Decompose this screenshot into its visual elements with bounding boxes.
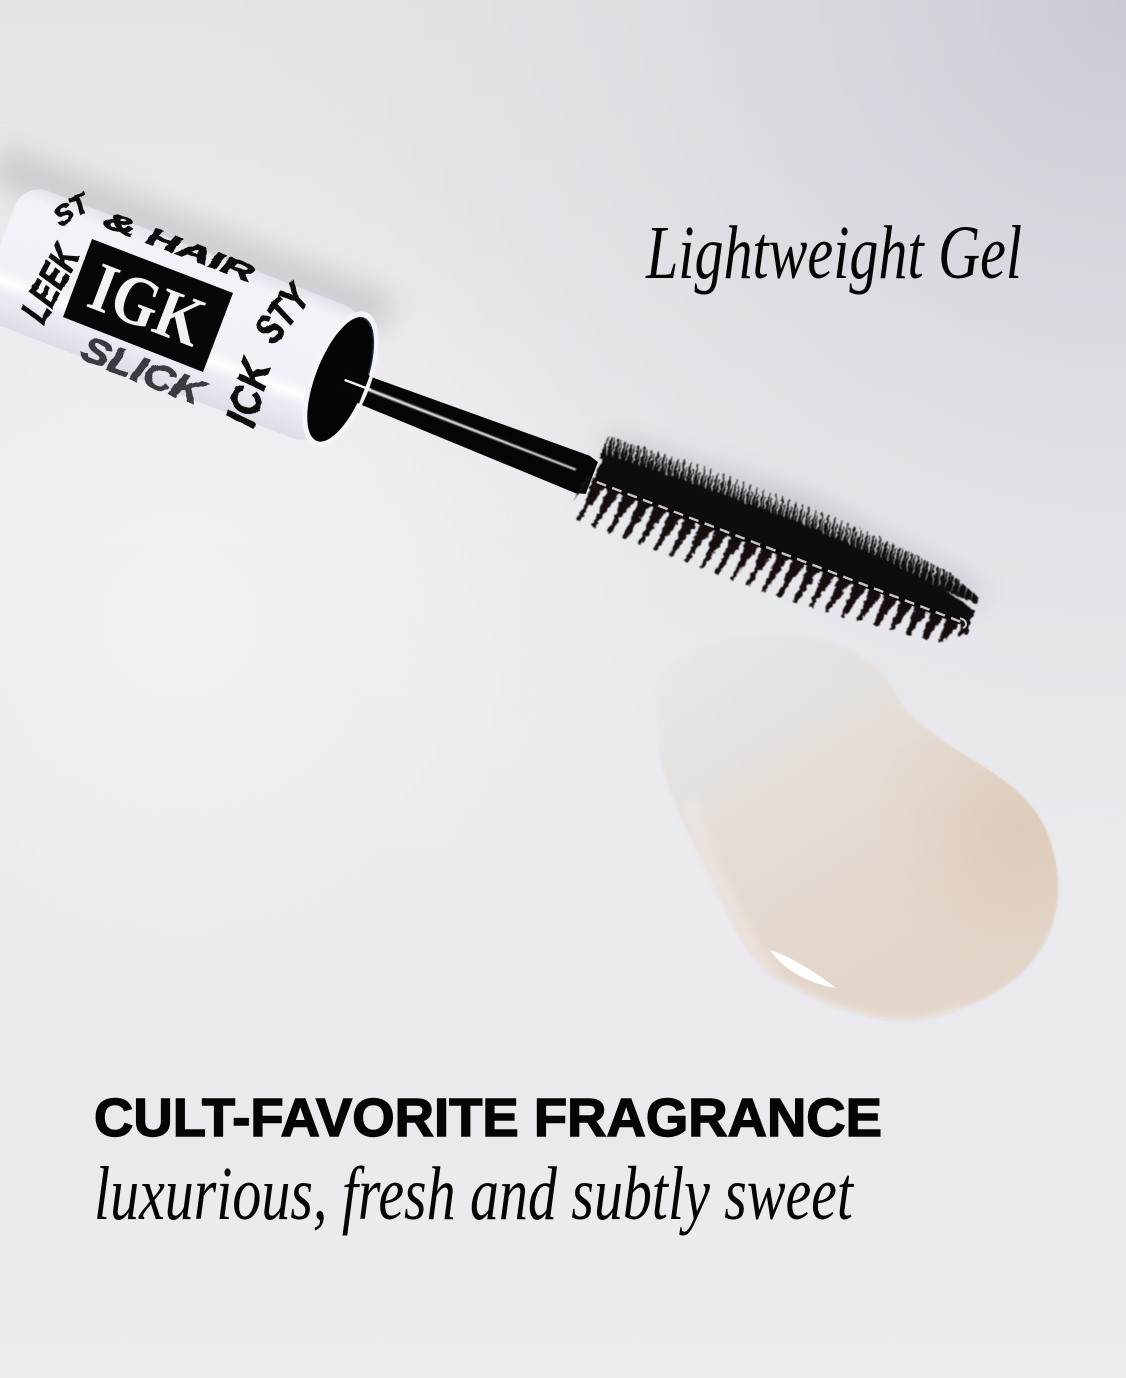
- brush lettering on tube: [12, 186, 321, 431]
- slick lettering: SLICK: [76, 327, 213, 415]
- ick lettering: ICK: [216, 352, 280, 431]
- logo text: IGK: [79, 249, 215, 362]
- heading: cult-favorite fragrance: CULT-FAVORITE FRAGRANCE: [94, 1088, 882, 1148]
- mascara wand: [362, 378, 980, 644]
- gel swatch: [655, 634, 1070, 1020]
- upper bristles: [598, 436, 980, 605]
- heading: lightweight gel: Lightweight Gel: [645, 211, 1022, 295]
- shaft base inside opening: [333, 366, 370, 404]
- subheading: fragrance description: luxurious, fresh and subtly sweet: [94, 1152, 854, 1236]
- spoolie brush: [573, 436, 980, 644]
- top lettering: ST: [48, 186, 97, 232]
- hair lettering: & HAIR: [99, 206, 259, 289]
- tube opening: [287, 301, 394, 457]
- side lettering: STY: [246, 274, 321, 352]
- product shadows: [0, 146, 1012, 606]
- lower bristles: [573, 475, 972, 644]
- wand shaft: [348, 369, 599, 497]
- twisted wire core: [595, 479, 968, 629]
- mascara tube: [0, 181, 396, 458]
- tube body: [0, 182, 368, 447]
- swatch highlight: [770, 950, 836, 988]
- logo box: [63, 239, 233, 372]
- tube brand label: [63, 239, 233, 372]
- sleek lettering: LEEK: [12, 236, 90, 330]
